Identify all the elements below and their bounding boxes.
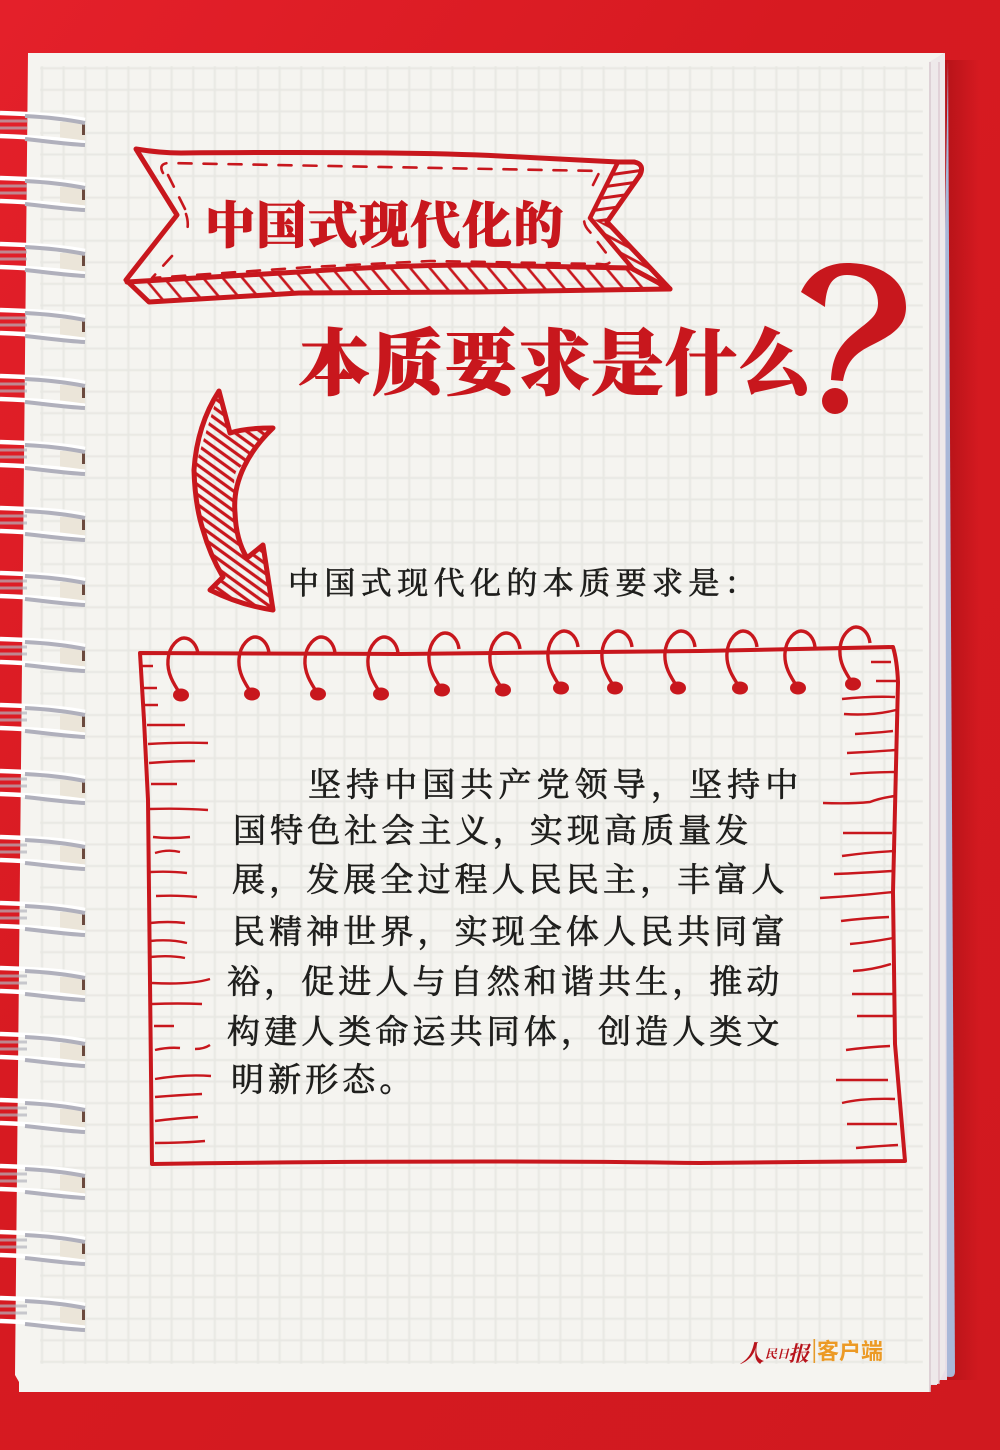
notepad frame [140, 627, 905, 1164]
body paragraph: 坚持中国共产党领导，坚持中 [308, 767, 803, 804]
big question mark [801, 263, 906, 414]
body paragraph: 明新形态。 [231, 1062, 416, 1099]
notebook shadow [945, 60, 979, 1380]
notepad border [140, 647, 905, 1164]
body paragraph: 国特色社会主义，实现高质量发 [233, 813, 752, 850]
body paragraph: 民精神世界，实现全体人民共同富 [232, 914, 788, 951]
binding hooks [168, 627, 870, 702]
spiral binding [0, 113, 85, 1330]
right edge ticks [820, 662, 898, 1148]
title line one: 中国式现代化的 [205, 198, 565, 254]
People's Daily client logo: 人 [740, 1342, 764, 1368]
title ribbon [126, 149, 672, 303]
People's Daily client logo: 民日 [765, 1347, 790, 1361]
People's Daily client logo: 报 [788, 1342, 812, 1366]
ribbon hatching [127, 162, 672, 303]
stitched dashes [152, 163, 610, 278]
title line two: 本质要求是什么 [298, 325, 816, 405]
People's Daily client logo [740, 1339, 883, 1368]
body paragraph: 裕，促进人与自然和谐共生，推动 [227, 964, 784, 1001]
body paragraph: 构建人类命运共同体，创造人类文 [227, 1014, 784, 1051]
body paragraph [227, 767, 803, 1099]
notebook page stack [920, 53, 955, 1392]
ribbon outline [126, 149, 670, 302]
People's Daily client logo: 客户端 [817, 1339, 883, 1364]
left edge ticks [142, 666, 211, 1143]
hand-drawn arrow [194, 391, 273, 610]
body paragraph: 展，发展全过程人民民主，丰富人 [232, 862, 788, 899]
intro sentence: 中国式现代化的本质要求是： [288, 566, 761, 601]
